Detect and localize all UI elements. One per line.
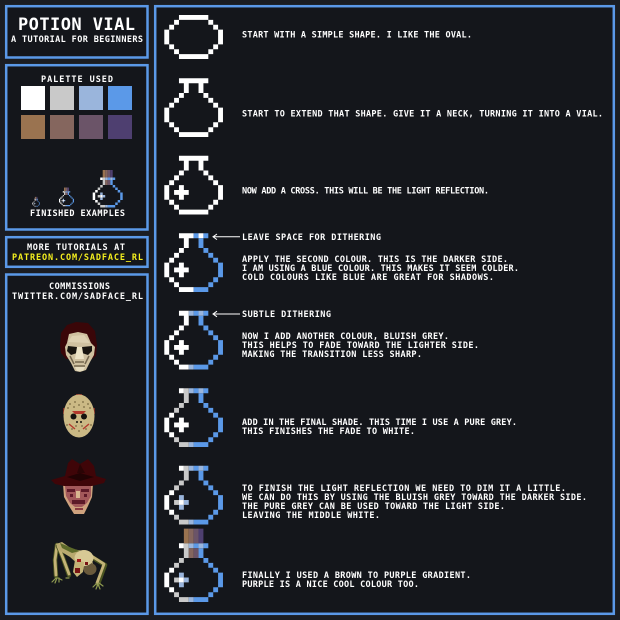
icon: vial with grey [164, 388, 223, 447]
text: WE CAN DO THIS BY USING THE BLUISH GREY TOWARD THE DARKER SIDE. [242, 493, 587, 503]
link: patreon: PATREON.COM/SADFACE_RL [12, 253, 143, 263]
portrait: masked face [60, 322, 97, 372]
heading: potion vial: POTION VIAL [18, 15, 135, 35]
text: MAKING THE TRANSITION LESS SHARP. [242, 350, 422, 360]
icon: vial outline [164, 78, 223, 137]
text: FINALLY I USED A BROWN TO PURPLE GRADIENT. [242, 571, 471, 581]
step 5 [164, 310, 479, 369]
step 7 [164, 466, 587, 524]
text: NOW I ADD ANOTHER COLOUR, BLUISH GREY. [242, 332, 449, 342]
text [242, 484, 587, 521]
icon: oval [164, 15, 223, 59]
text: THIS HELPS TO FADE TOWARD THE LIGHTER SIDE. [242, 341, 479, 351]
portrait: crawling creature [52, 545, 105, 589]
panel: tutorial steps [155, 6, 614, 614]
text: more tutorials at: MORE TUTORIALS AT [27, 243, 125, 253]
arrow [213, 234, 240, 240]
text: LEAVING THE MIDDLE WHITE. [242, 511, 380, 521]
text: TO FINISH THE LIGHT REFLECTION WE NEED TO DIM IT A LITTLE. [242, 484, 566, 494]
text: I AM USING A BLUE COLOUR. THIS MAKES IT SEEM COLDER. [242, 264, 519, 274]
panel: title [6, 6, 148, 57]
icon: finished vial with cork [164, 529, 223, 602]
creature torso and skull [56, 542, 96, 577]
text: START WITH A SIMPLE SHAPE. I LIKE THE OVAL. [242, 30, 472, 40]
text: twitter: TWITTER.COM/SADFACE_RL [12, 292, 143, 302]
text: PURPLE IS A NICE COOL COLOUR TOO. [242, 580, 419, 590]
subtitle: A TUTORIAL FOR BEGINNERS [11, 35, 143, 45]
icon: vial with dimmed cross [164, 466, 223, 524]
palette swatches [21, 86, 132, 139]
step 1 [164, 15, 472, 59]
step 2 [164, 78, 603, 137]
panel: more tutorials [6, 237, 148, 267]
text: THE PURE GREY CAN BE USED TOWARD THE LIGHT SIDE. [242, 502, 505, 512]
text: THIS FINISHES THE FADE TO WHITE. [242, 427, 415, 437]
callout: SUBTLE DITHERING [242, 310, 331, 320]
panel: commissions [6, 274, 148, 614]
icon: vial with dithering [164, 311, 223, 369]
callout: LEAVE SPACE FOR DITHERING [242, 233, 381, 243]
step 8 [164, 529, 471, 602]
heading: palette used: PALETTE USED [41, 75, 113, 85]
text [242, 571, 471, 590]
text: NOW ADD A CROSS. THIS WILL BE THE LIGHT REFLECTION. [242, 186, 489, 196]
step 6 [164, 388, 517, 447]
arrow [213, 311, 240, 317]
text [242, 255, 519, 283]
portrait: fedora man [51, 459, 106, 514]
step 4 [164, 233, 519, 292]
text [242, 332, 479, 360]
text: commissions: COMMISSIONS [49, 282, 110, 292]
text: START TO EXTEND THAT SHAPE. GIVE IT A NECK, TURNING IT INTO A VIAL. [242, 110, 603, 120]
finished vial examples [32, 170, 123, 208]
step 3 [164, 156, 489, 214]
panel: palette [6, 65, 148, 230]
text [242, 418, 517, 437]
icon: vial with cross [164, 156, 223, 214]
icon: vial with blue [164, 233, 223, 292]
label: finished examples: FINISHED EXAMPLES [30, 209, 125, 219]
text: ADD IN THE FINAL SHADE. THIS TIME I USE A PURE GREY. [242, 418, 517, 428]
portrait: hockey mask [63, 394, 95, 438]
text: COLD COLOURS LIKE BLUE ARE GREAT FOR SHADOWS. [242, 273, 494, 283]
text: APPLY THE SECOND COLOUR. THIS IS THE DARKER SIDE. [242, 255, 508, 265]
